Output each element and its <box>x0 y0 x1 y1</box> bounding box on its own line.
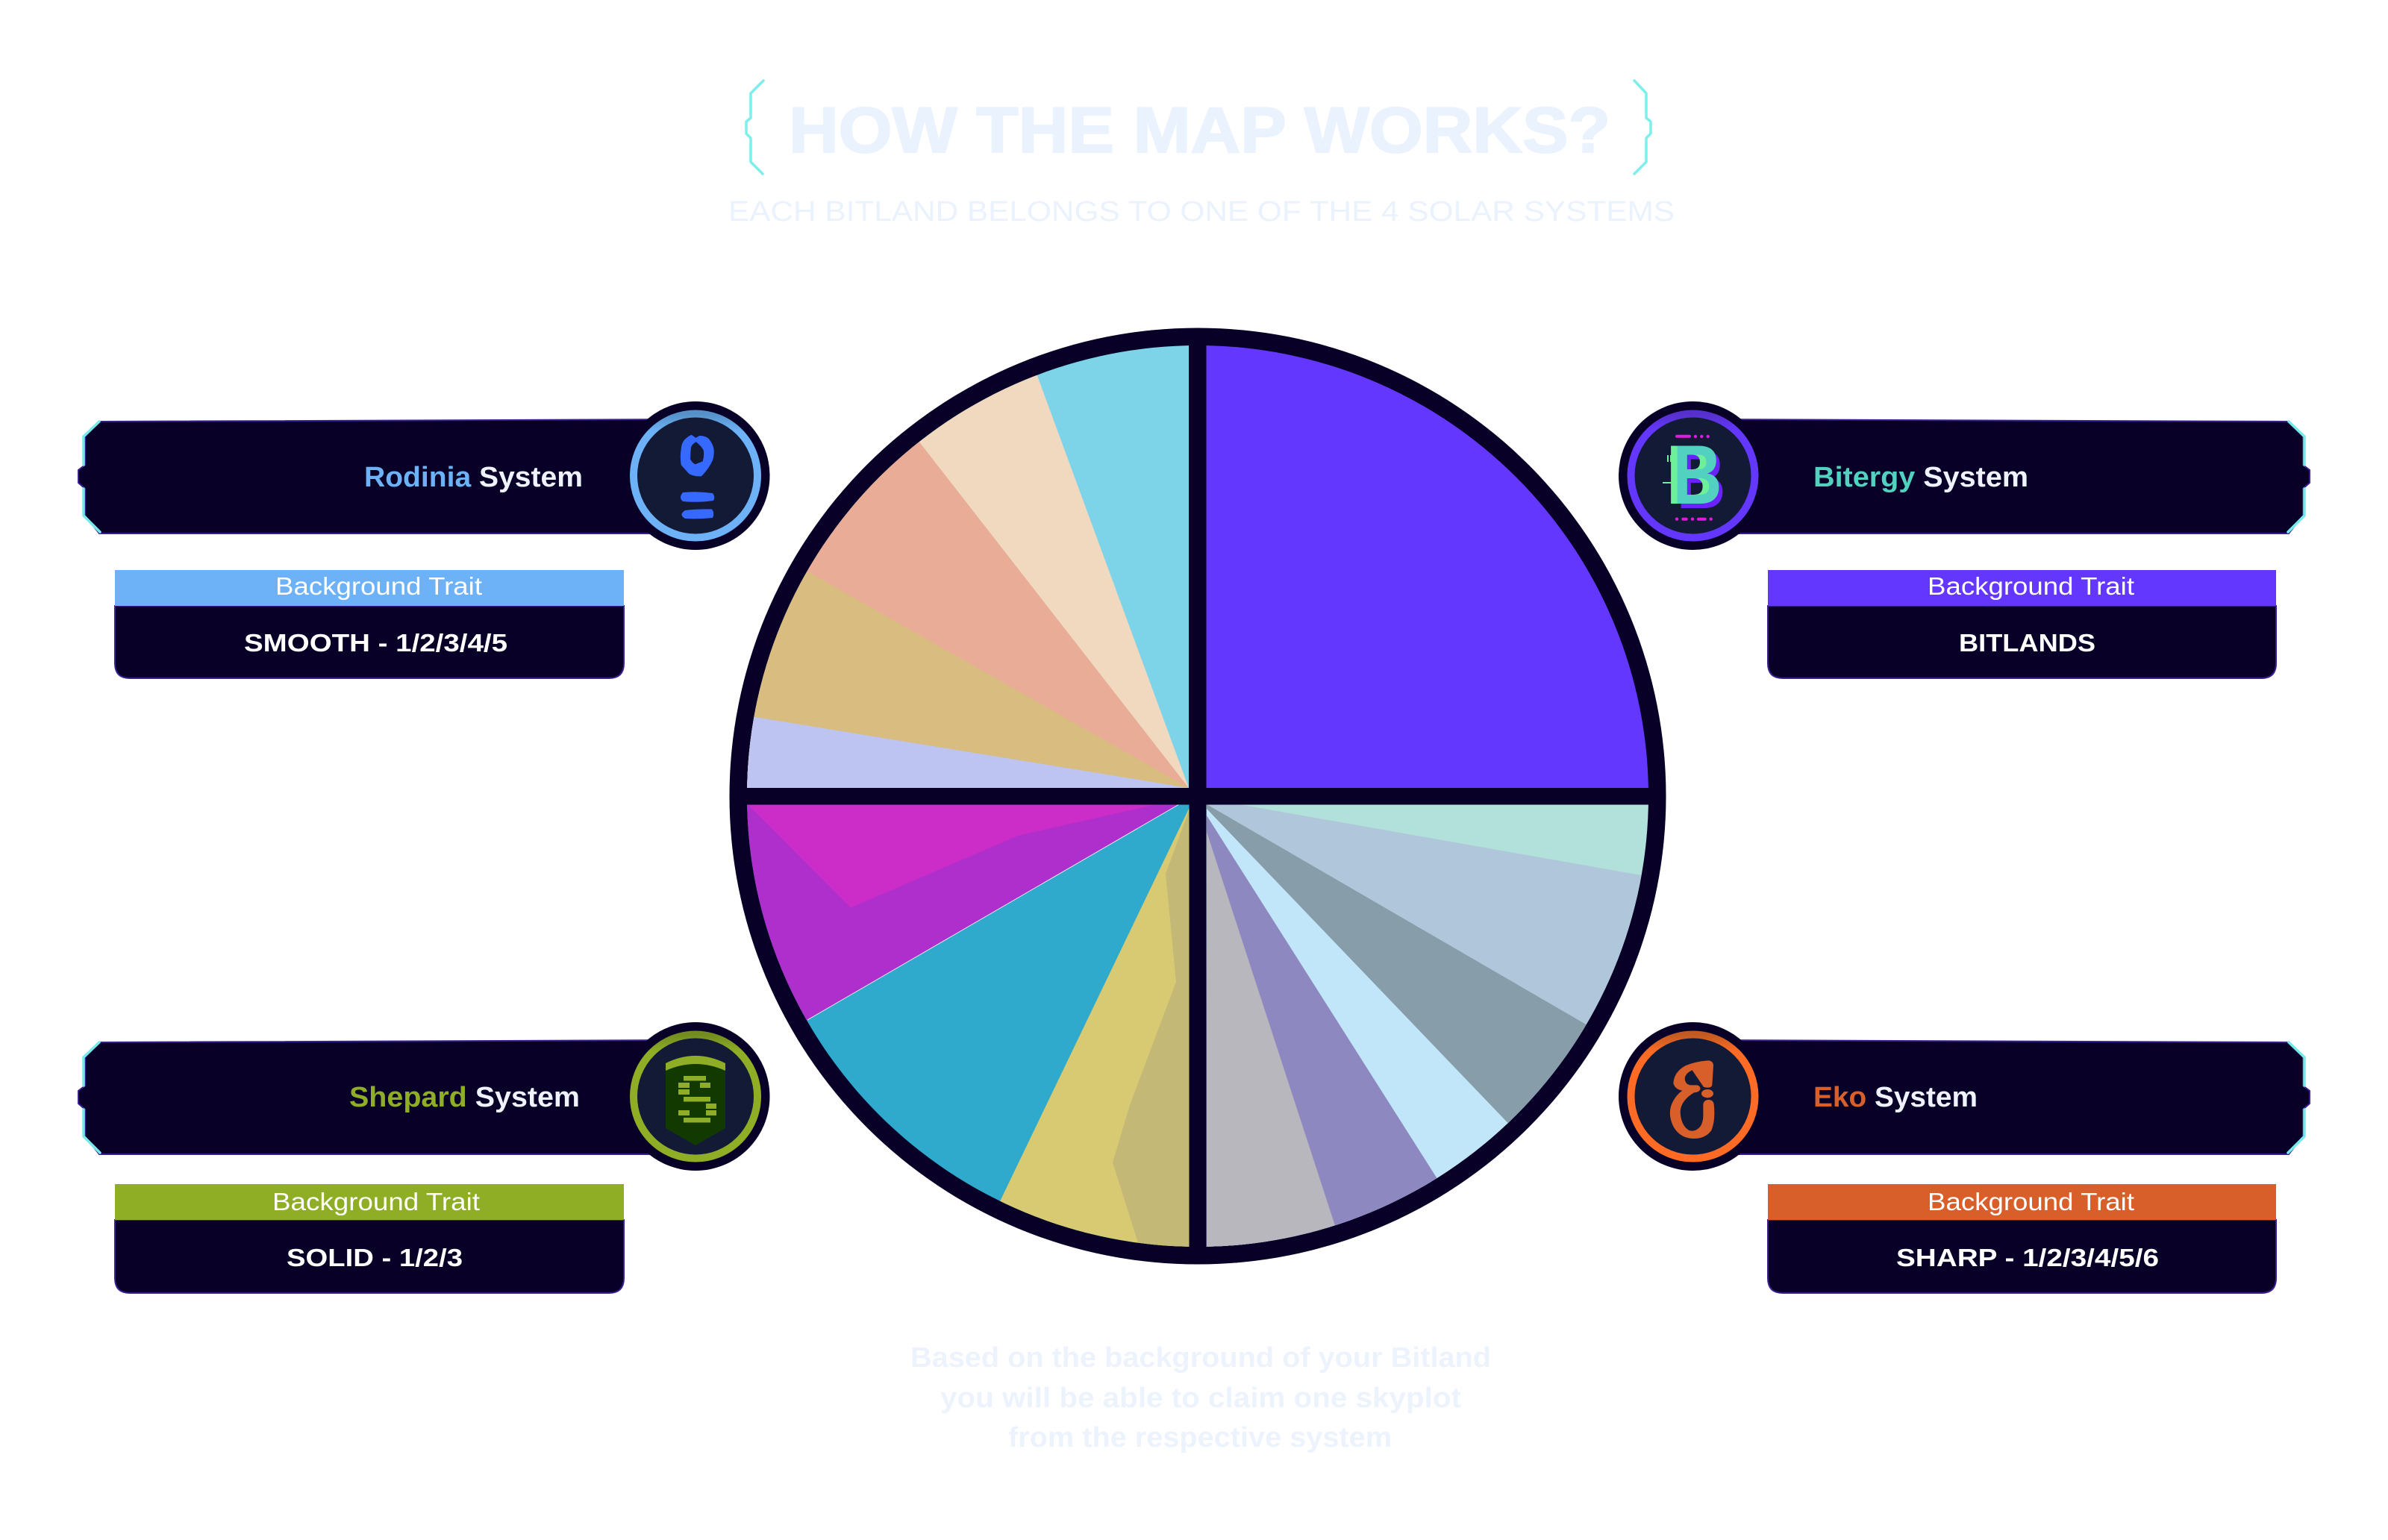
icon: Bitergy badge: B <box>1673 428 1722 522</box>
card header label: Background Trait <box>1928 572 2134 600</box>
panel: Bitergy banner <box>1694 419 2310 533</box>
subtitle: EACH BITLAND BELONGS TO ONE OF THE 4 SOLAR SYSTEMS <box>728 196 1675 228</box>
footer text block: you will be able to claim one skyplot <box>940 1383 1461 1414</box>
banner body <box>78 419 694 533</box>
card value: SOLID - 1/2/3 <box>287 1244 463 1271</box>
footer text block: Based on the background of your Bitland <box>910 1342 1491 1374</box>
panel: Bitergy trait card <box>1768 570 2276 678</box>
pie horizontal divider <box>730 788 1666 804</box>
card value: SHARP - 1/2/3/4/5/6 <box>1896 1244 2159 1271</box>
pie slices <box>747 345 1648 1247</box>
card header label: Background Trait <box>272 1188 480 1215</box>
banner cyan edges <box>2288 422 2304 532</box>
banner label: Rodinia System <box>364 462 583 493</box>
quadrant: Rodinia <box>747 345 1189 788</box>
banner body <box>1694 1040 2310 1154</box>
card body <box>115 1220 624 1293</box>
banner label: Eko System <box>1813 1082 1978 1113</box>
quadrant: Eko <box>1206 804 1648 1247</box>
banner body <box>78 1040 694 1154</box>
banner label: Shepard System <box>349 1082 580 1113</box>
panel: Rodinia banner <box>78 419 694 533</box>
pie outer disc <box>730 328 1666 1264</box>
icon: right title bracket <box>1634 81 1651 174</box>
panel: Shepard trait card <box>115 1184 624 1293</box>
banner cyan edges <box>84 1042 100 1153</box>
card value: BITLANDS <box>1959 629 2095 657</box>
card header <box>115 570 624 606</box>
icon: Bitergy badge <box>1619 401 1767 550</box>
pie chart <box>730 328 1666 1264</box>
banner body <box>1694 419 2310 533</box>
card header <box>1768 570 2276 606</box>
icon: Rodinia badge <box>621 401 770 550</box>
card body <box>1768 1220 2276 1293</box>
footer text block: from the respective system <box>1008 1422 1392 1453</box>
panel: Eko trait card <box>1768 1184 2276 1293</box>
pie vertical divider <box>1190 330 1206 1262</box>
panel: Eko banner <box>1694 1040 2310 1154</box>
card body <box>1768 606 2276 678</box>
icon: Eko badge <box>1619 1022 1767 1171</box>
panel: Rodinia trait card <box>115 570 624 678</box>
footer text block <box>910 1342 1491 1453</box>
panel: Shepard banner <box>78 1040 694 1154</box>
icon: Shepard badge <box>621 1022 770 1171</box>
title: HOW THE MAP WORKS? <box>789 95 1610 166</box>
card value: SMOOTH - 1/2/3/4/5 <box>244 629 507 657</box>
quadrant: Bitergy <box>1206 328 1669 788</box>
card header <box>115 1184 624 1220</box>
quadrant: Shepard <box>747 804 1190 1247</box>
card header <box>1768 1184 2276 1220</box>
card header label: Background Trait <box>1928 1188 2134 1215</box>
icon: left title bracket <box>746 81 763 174</box>
card header label: Background Trait <box>275 572 482 600</box>
card body <box>115 606 624 678</box>
banner cyan edges <box>2288 1042 2304 1153</box>
banner label: Bitergy System <box>1813 462 2028 493</box>
icon: Bitergy badge: B <box>1666 428 1716 522</box>
banner cyan edges <box>84 422 100 532</box>
icon: Bitergy badge: B <box>1676 433 1725 526</box>
